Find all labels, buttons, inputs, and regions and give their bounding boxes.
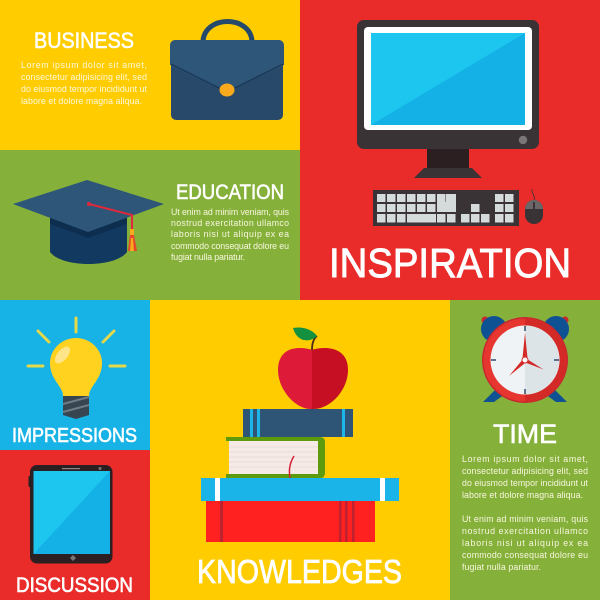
- text block: time: laboris nisi ut aliquip ex ea: [462, 538, 588, 548]
- heading: business: BUSINESS: [34, 28, 134, 53]
- text block: time: fugiat nulla pariatur.: [462, 562, 541, 572]
- text block: time: [462, 454, 589, 572]
- heading: discussion: DISCUSSION: [16, 574, 133, 597]
- text block: time: commodo consequat dolore eu: [462, 550, 588, 560]
- text block: business: Lorem ipsum dolor sit amet,: [21, 60, 147, 70]
- heading: impressions: IMPRESSIONS: [12, 425, 137, 447]
- heading: time: TIME: [493, 419, 557, 449]
- icon: keyboard: [373, 190, 519, 226]
- text block: time: do eiusmod tempor incididunt ut: [462, 478, 589, 488]
- text block: business: labore et dolore magna aliqua.: [21, 96, 142, 106]
- text block: time: Lorem ipsum dolor sit amet,: [462, 454, 588, 464]
- panel: business: [0, 0, 300, 150]
- icon: alarm clock: [481, 316, 569, 403]
- text block: education: laboris nisi ut aliquip ex ea: [171, 229, 289, 239]
- text block: education: nostrud exercitation ullamco: [171, 218, 289, 228]
- icon: light bulb: [28, 318, 125, 419]
- heading: knowledges: KNOWLEDGES: [197, 554, 402, 591]
- panel: discussion: [0, 450, 150, 600]
- text block: time: nostrud exercitation ullamco: [462, 526, 588, 536]
- icon: graduation cap: [13, 180, 164, 264]
- text block: business: do eiusmod tempor incididunt ut: [21, 84, 148, 94]
- text block: business: [21, 60, 148, 106]
- icon: computer monitor: [357, 20, 539, 178]
- panel: inspiration: [300, 0, 600, 300]
- heading: education: EDUCATION: [176, 180, 284, 204]
- text block: education: [171, 207, 290, 262]
- text block: business: consectetur adipisicing elit, sed: [21, 72, 147, 82]
- text block: education: Ut enim ad minim veniam, quis: [171, 207, 290, 217]
- icon: apple: [278, 327, 348, 409]
- icon: tablet: [28, 465, 112, 564]
- panel: knowledges: [150, 300, 450, 600]
- text block: education: fugiat nulla pariatur.: [171, 252, 245, 262]
- text block: time: consectetur adipisicing elit, sed: [462, 466, 588, 476]
- icon: mouse: [525, 189, 543, 224]
- icon: book stack: [201, 409, 399, 542]
- text block: time: Ut enim ad minim veniam, quis: [462, 514, 589, 524]
- panel: impressions: [0, 300, 150, 450]
- text block: education: commodo consequat dolore eu: [171, 241, 289, 251]
- panel: time: [450, 300, 600, 600]
- icon: briefcase: [170, 22, 284, 120]
- panel: education: [0, 150, 300, 300]
- heading: inspiration: INSPIRATION: [329, 240, 571, 286]
- text block: time: labore et dolore magna aliqua.: [462, 490, 583, 500]
